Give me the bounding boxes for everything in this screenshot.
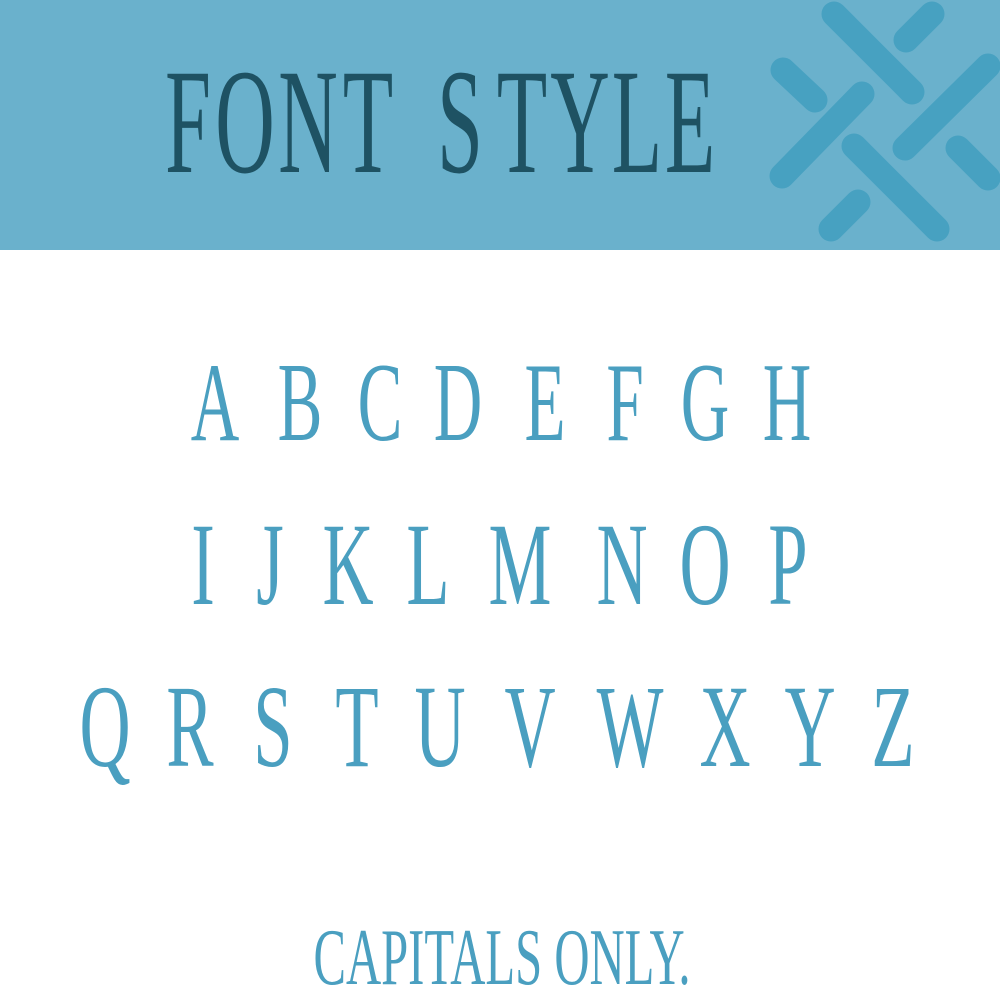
- header band: [0, 0, 1000, 250]
- alphabet row 3: Y: [784, 662, 836, 793]
- alphabet row 2: [191, 500, 808, 631]
- title: O: [215, 39, 275, 205]
- alphabet row 1: E: [524, 341, 566, 464]
- alphabet row 3: R: [166, 662, 214, 793]
- footer caption: CAPITALS ONLY.: [314, 914, 690, 1000]
- title: E: [665, 39, 715, 205]
- alphabet row 3: Z: [871, 662, 915, 793]
- alphabet row 2: K: [322, 500, 374, 631]
- alphabet row 3: T: [335, 662, 379, 793]
- title: F: [165, 39, 211, 205]
- alphabet row 2: L: [406, 500, 450, 631]
- alphabet row 1: G: [681, 341, 729, 464]
- alphabet row 2: P: [768, 500, 808, 631]
- alphabet row 1: H: [763, 341, 811, 464]
- alphabet row 1: B: [278, 341, 322, 464]
- alphabet row 3: S: [253, 662, 293, 793]
- title: S: [437, 39, 483, 205]
- alphabet row 2: I: [191, 500, 215, 631]
- alphabet row 1: F: [606, 341, 644, 464]
- title: [165, 39, 715, 205]
- title: L: [612, 39, 662, 205]
- alphabet row 1: D: [434, 341, 482, 464]
- alphabet row 2: O: [679, 500, 731, 631]
- title: T: [497, 39, 547, 205]
- alphabet row 3: X: [699, 662, 751, 793]
- alphabet row 1: [191, 341, 811, 464]
- alphabet row 3: U: [414, 662, 466, 793]
- alphabet row 3: V: [504, 662, 556, 793]
- title: Y: [550, 39, 610, 205]
- alphabet row 3: [79, 662, 915, 793]
- alphabet row 2: J: [256, 500, 284, 631]
- alphabet row 3: Q: [79, 662, 131, 793]
- alphabet row 2: N: [596, 500, 648, 631]
- title: N: [278, 39, 338, 205]
- alphabet row 3: W: [597, 662, 664, 793]
- title: T: [343, 39, 393, 205]
- alphabet row 1: A: [191, 341, 239, 464]
- alphabet row 1: C: [358, 341, 402, 464]
- icon: woven cross pattern: [782, 14, 988, 229]
- alphabet row 2: M: [489, 500, 551, 631]
